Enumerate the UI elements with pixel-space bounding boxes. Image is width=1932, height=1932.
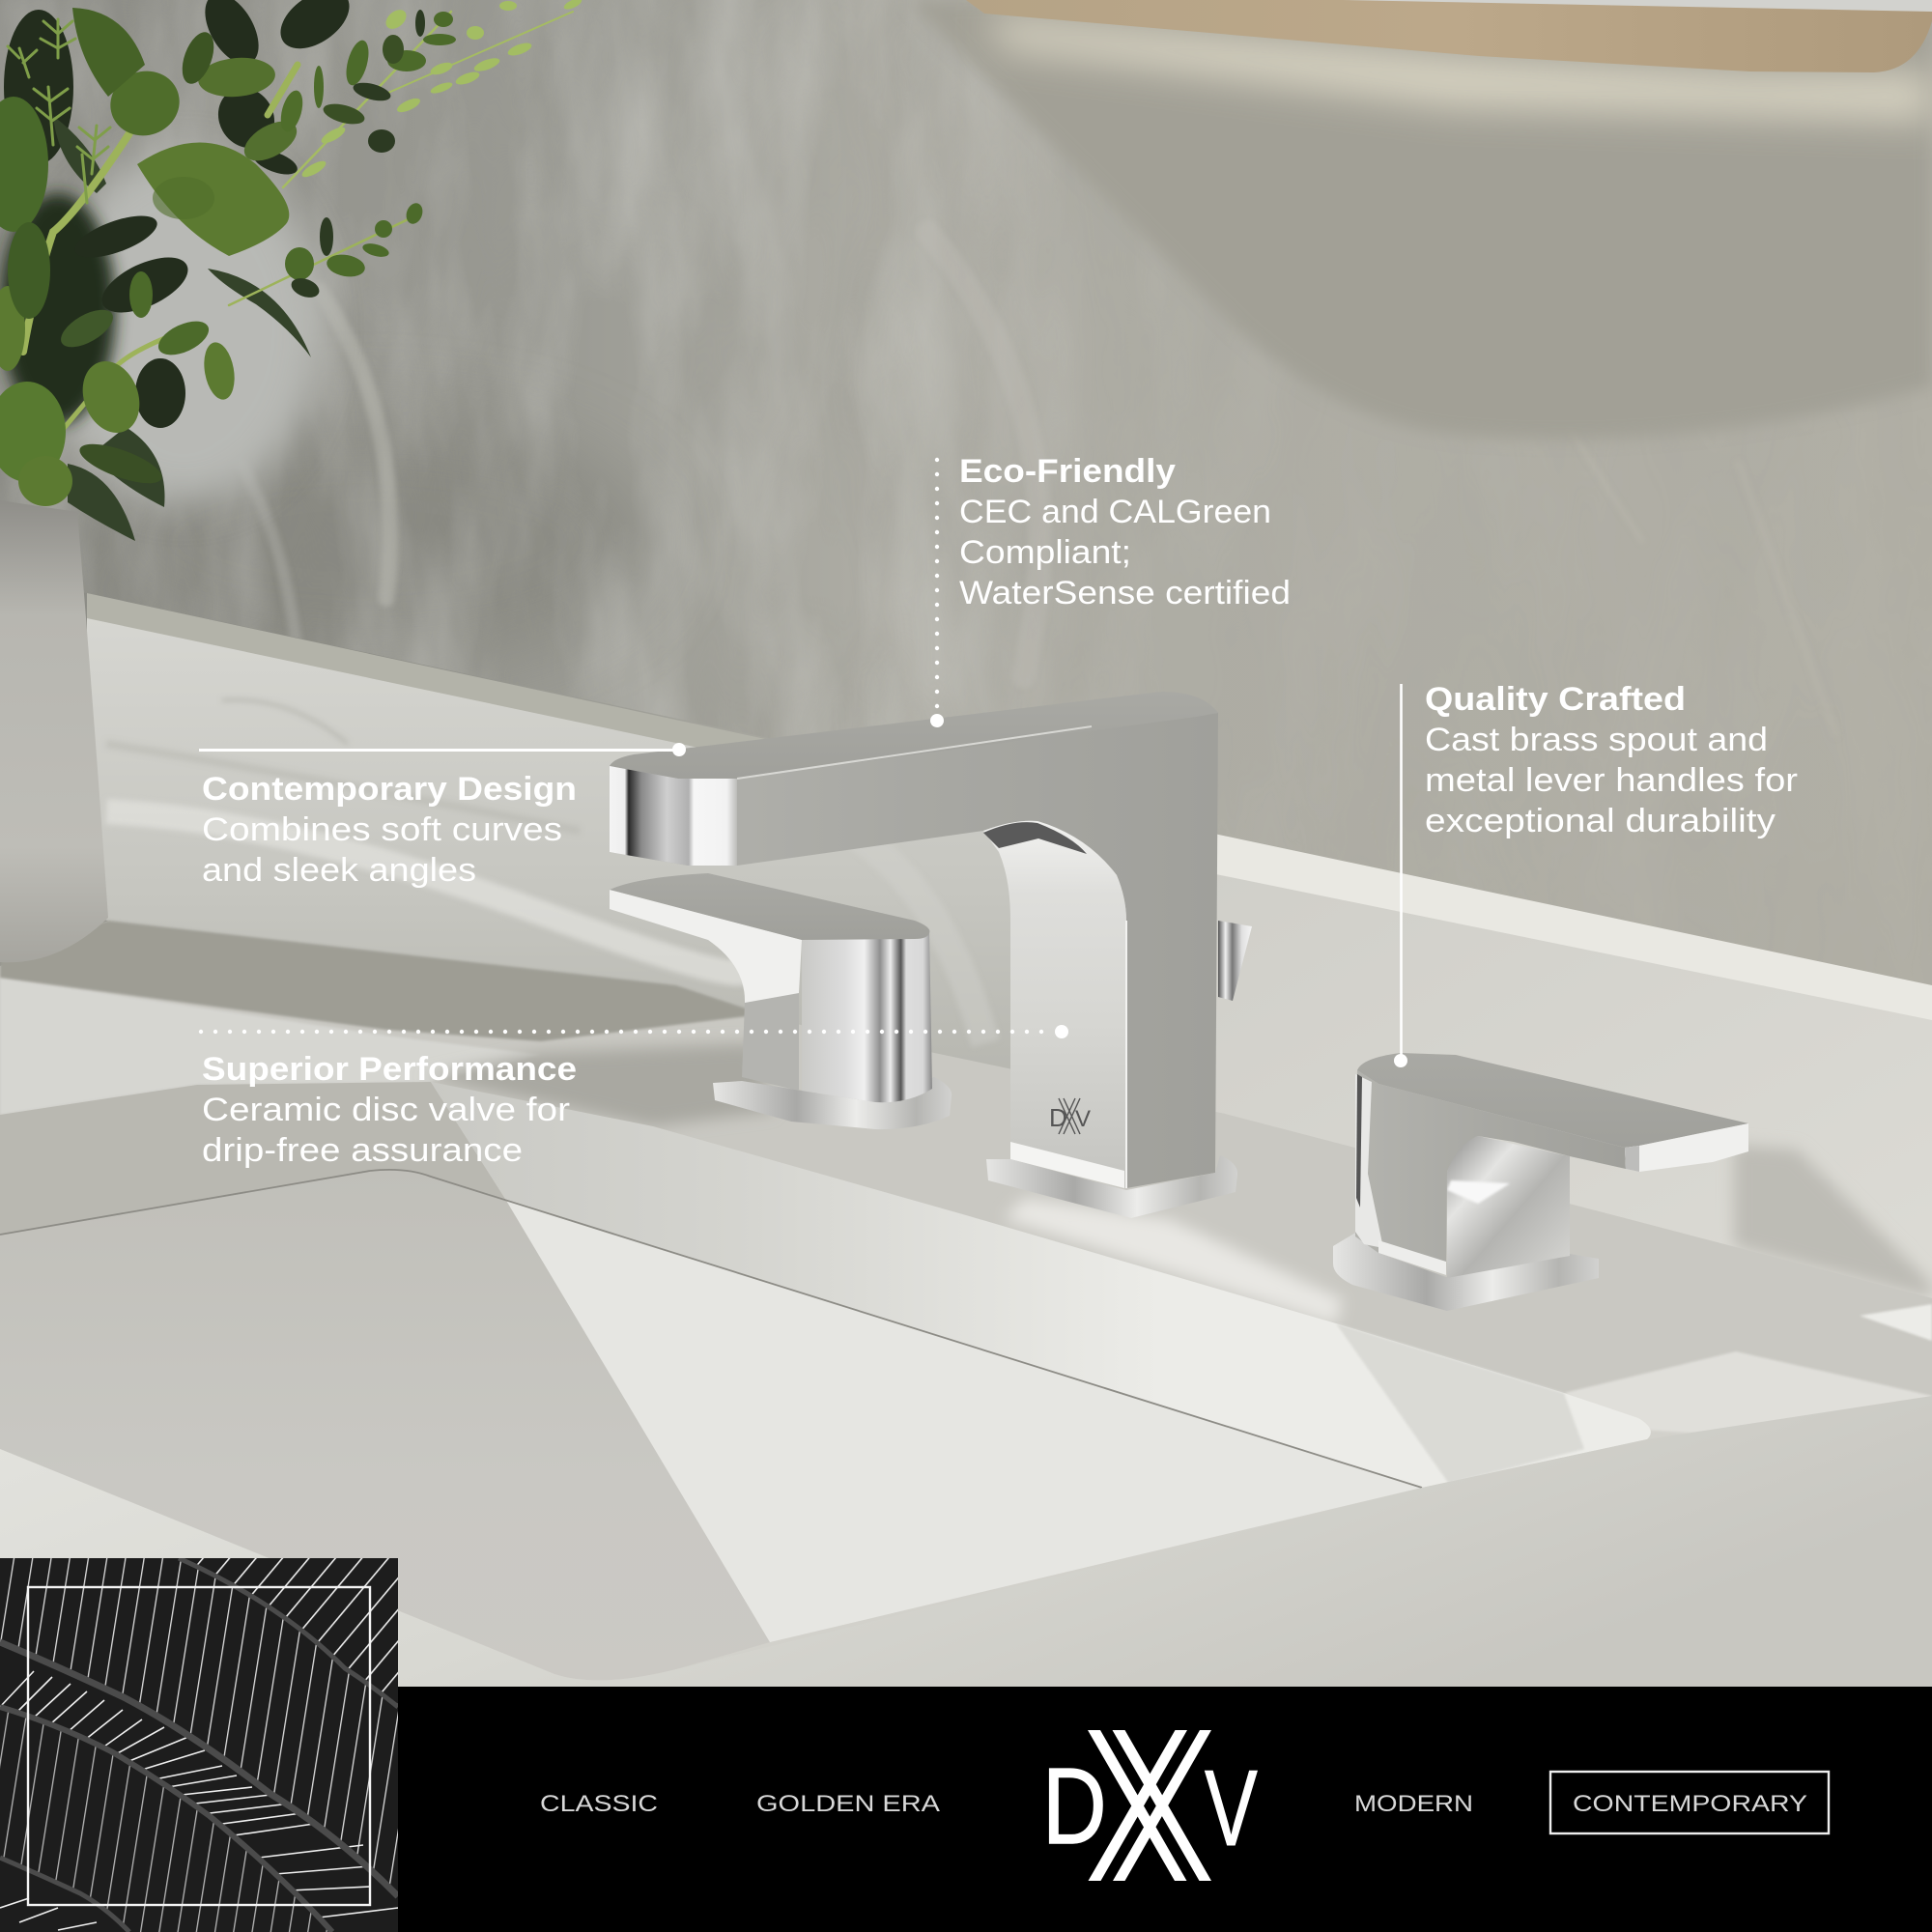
lever tip xyxy=(1625,1123,1748,1172)
structural bands xyxy=(0,1558,398,1932)
text block: Contemporary Design xyxy=(202,771,577,808)
navigation labels: GOLDEN ERA xyxy=(756,1791,941,1817)
long dark leaves xyxy=(53,116,311,541)
handle shadow on backsplash xyxy=(1734,1145,1932,1298)
ladder lines xyxy=(0,1671,398,1930)
wood shelf xyxy=(966,0,1932,72)
stems xyxy=(23,12,573,432)
small DXV mark: D xyxy=(1049,1103,1067,1132)
rear pop-up lever xyxy=(1218,921,1252,1001)
spout top surface xyxy=(610,692,1218,779)
counter top surface xyxy=(0,921,1932,1396)
panel background xyxy=(0,1558,398,1932)
navigation labels: MODERN xyxy=(1354,1791,1473,1817)
cube highlight xyxy=(1447,1180,1510,1204)
needle sprigs xyxy=(8,19,110,203)
text block xyxy=(1425,681,1798,839)
marble veining on wall xyxy=(0,0,1045,734)
lit back face of sink xyxy=(431,1082,1651,1488)
small DXV mark xyxy=(1049,1098,1091,1134)
round sprig leaves xyxy=(285,10,456,301)
text block: drip-free assurance xyxy=(202,1132,523,1169)
basin rim line xyxy=(0,1170,1422,1488)
text block: and sleek angles xyxy=(202,852,476,889)
small DXV mark: V xyxy=(1075,1106,1091,1132)
text block xyxy=(959,453,1291,611)
DXV logo xyxy=(1042,1730,1258,1881)
text block xyxy=(202,1051,577,1169)
left ledge top xyxy=(87,593,1219,858)
body dark reflection xyxy=(1356,1074,1362,1208)
left backsplash xyxy=(87,614,1225,1114)
leader end dot xyxy=(930,714,944,727)
handle base plate xyxy=(1333,1232,1599,1311)
right backsplash xyxy=(1111,848,1932,1298)
text block: CEC and CALGreen xyxy=(959,494,1271,530)
left handle xyxy=(610,873,952,1129)
active category frame xyxy=(1550,1772,1829,1833)
backsplash marble veins xyxy=(106,700,985,1043)
spout end chrome xyxy=(610,766,737,866)
body chrome left edge xyxy=(1355,1074,1383,1248)
lit counter left xyxy=(0,978,541,1115)
handle top surface xyxy=(610,873,929,940)
handle body xyxy=(1355,1070,1626,1275)
spout faucet xyxy=(610,692,1252,1218)
sun patch far right xyxy=(1860,1304,1932,1341)
lever top surface xyxy=(1357,1053,1748,1148)
text block: Superior Performance xyxy=(202,1051,577,1088)
plant xyxy=(0,0,583,541)
DXV logo: D xyxy=(1042,1747,1107,1866)
text block: Ceramic disc valve for xyxy=(202,1092,570,1128)
callout: Superior Performance xyxy=(201,1025,1068,1169)
sun patches right xyxy=(1564,1351,1932,1449)
spout top highlight edge xyxy=(737,726,1092,779)
bottom black bar xyxy=(398,1687,1932,1932)
dotted leader xyxy=(201,1030,1053,1034)
basin interior shaded xyxy=(0,1170,770,1680)
dark foliage mass xyxy=(0,0,360,428)
navigation labels xyxy=(540,1791,1807,1817)
text block: Quality Crafted xyxy=(1425,681,1686,718)
navigation labels: CONTEMPORARY xyxy=(1573,1791,1807,1817)
text block: metal lever handles for xyxy=(1425,762,1798,799)
stem lower highlight xyxy=(1010,1142,1124,1188)
line fields xyxy=(0,1558,398,1932)
text block: Compliant; xyxy=(959,534,1131,571)
wall shadow with curved edge xyxy=(908,0,1932,439)
lit strip on counter xyxy=(1005,1198,1343,1325)
text block xyxy=(202,771,577,889)
lower counter surface xyxy=(0,1396,1932,1687)
white inner frame xyxy=(28,1587,370,1905)
leader end dot xyxy=(672,743,686,756)
under-shelf light glow xyxy=(985,15,1932,121)
shadow wedge on face xyxy=(1336,1323,1584,1484)
architectural photo panel xyxy=(0,1558,398,1932)
marble wall xyxy=(0,0,1932,1082)
navigation labels: CLASSIC xyxy=(540,1791,658,1817)
shelf top edge xyxy=(1343,0,1932,12)
plant backdrop glow xyxy=(48,155,319,502)
text block: exceptional durability xyxy=(1425,803,1776,839)
solid leader xyxy=(199,749,676,752)
vase xyxy=(0,500,108,962)
darker lower-left wall xyxy=(77,415,657,667)
stem right edge xyxy=(1125,921,1127,1188)
left counter face in shadow xyxy=(0,1082,505,1235)
DXV logo: V xyxy=(1205,1748,1258,1868)
right handle xyxy=(1333,1053,1748,1311)
text block: WaterSense certified xyxy=(959,575,1291,611)
stem dark reflection xyxy=(983,822,1087,854)
solid leader xyxy=(1400,684,1403,1058)
callout: Quality Crafted xyxy=(1394,681,1798,1067)
dotted leader xyxy=(935,460,939,715)
counter base xyxy=(0,966,1932,1687)
spout base xyxy=(986,1155,1237,1218)
leader end dot xyxy=(1055,1025,1068,1038)
leader end dot xyxy=(1394,1054,1407,1067)
handle cylinder xyxy=(802,930,932,1102)
text block: Eco-Friendly xyxy=(959,453,1176,490)
handle face xyxy=(610,890,802,1003)
callout: Eco-Friendly xyxy=(930,453,1291,727)
body lower highlight xyxy=(1378,1240,1446,1275)
callout: Contemporary Design xyxy=(199,743,686,889)
light green buds xyxy=(299,0,583,180)
spout body xyxy=(610,713,1218,1188)
counter shadow band xyxy=(0,921,763,1041)
inner cube xyxy=(1447,1136,1570,1278)
text block: Cast brass spout and xyxy=(1425,722,1768,758)
handle gray stem xyxy=(742,993,799,1091)
lever tip chrome xyxy=(1625,1146,1639,1172)
large leaves xyxy=(0,8,306,506)
text block: Combines soft curves xyxy=(202,811,562,848)
basin interior lit xyxy=(505,1199,1422,1642)
faucet cast shadow on counter xyxy=(425,1043,773,1126)
inner stem chrome xyxy=(983,821,1126,1188)
right ledge lip xyxy=(1159,822,1932,1020)
handle base xyxy=(713,1077,952,1129)
